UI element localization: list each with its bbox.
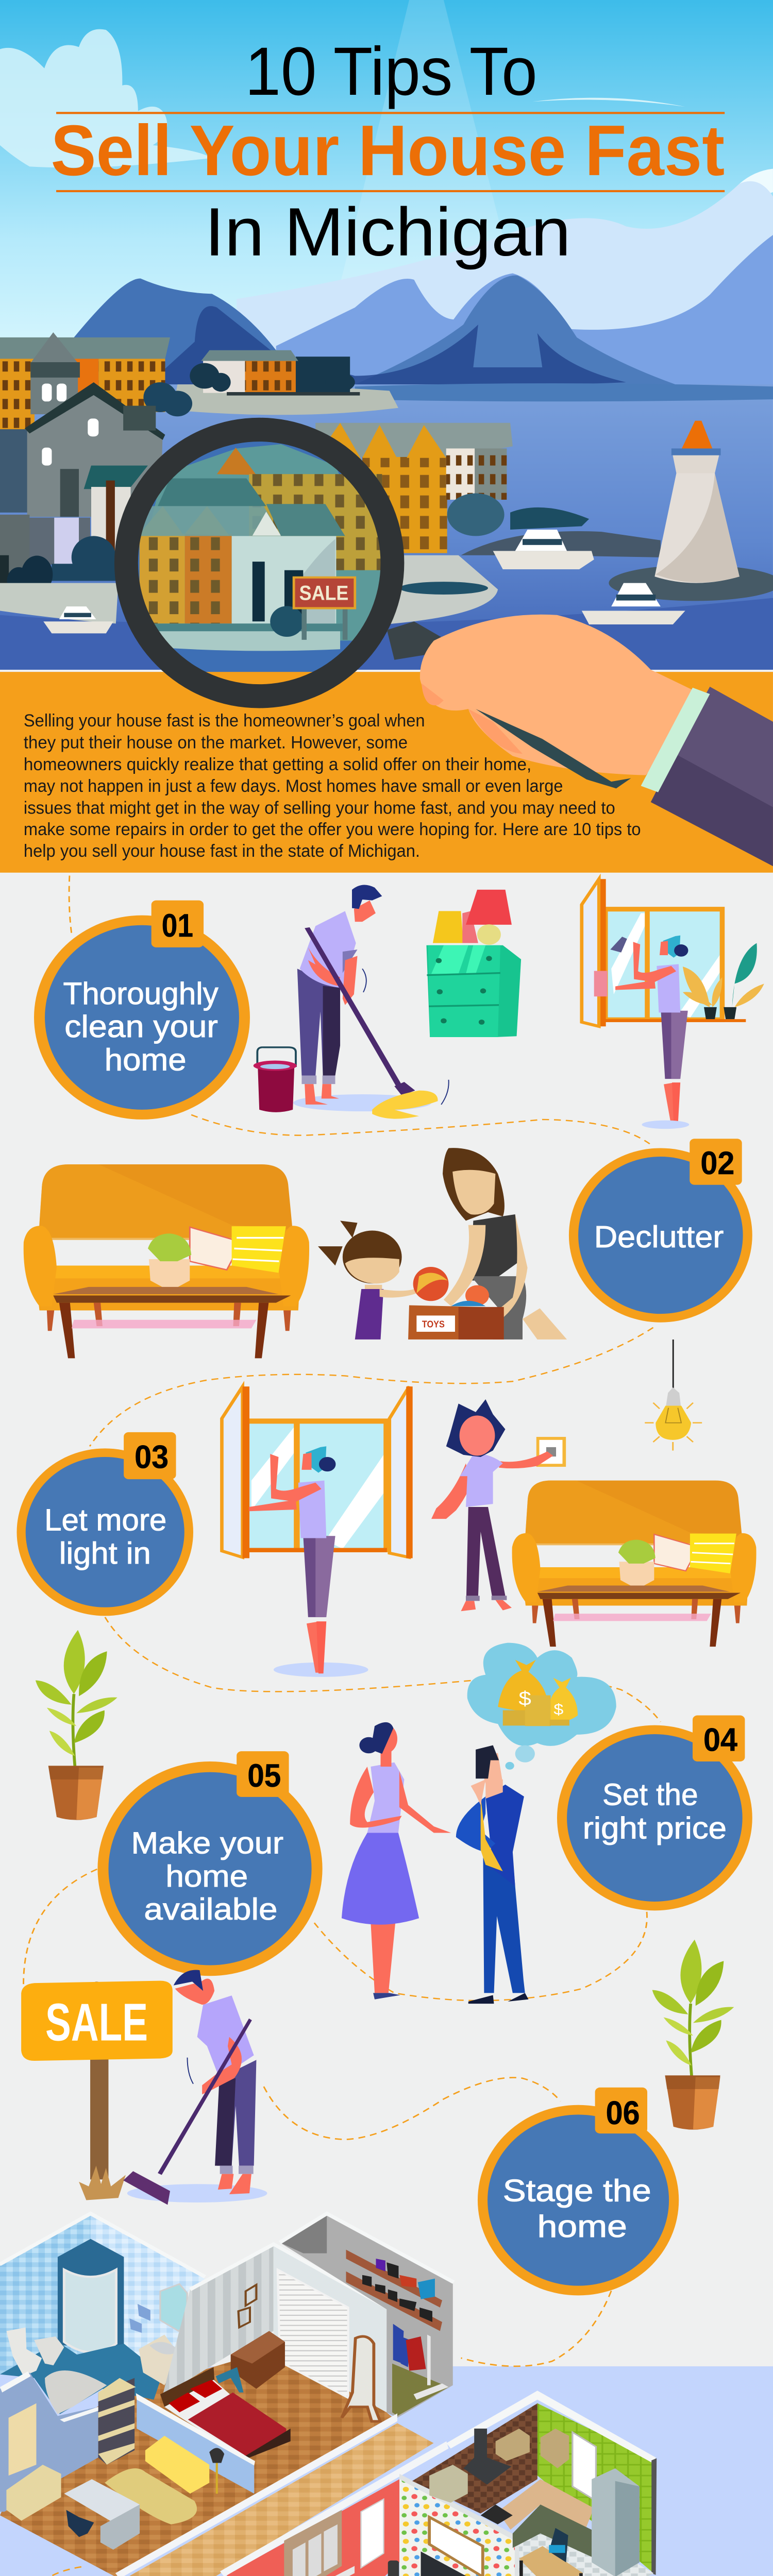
intro text: help you sell your house fast in the state of Michigan. bbox=[24, 841, 420, 861]
tip 01 badge: 01 bbox=[162, 908, 193, 944]
route: tip 6 to house bbox=[461, 2291, 611, 2366]
icon: thought cloud with money: $ bbox=[518, 1687, 531, 1709]
tip 01 badge bbox=[34, 901, 250, 1120]
illustration: woman and businessman talking bbox=[342, 1722, 528, 2004]
tip 06 badge: Stage the bbox=[503, 2173, 651, 2208]
house scene in lens bbox=[136, 439, 382, 687]
route: tip 4 to tip 5 bbox=[314, 1912, 647, 2001]
tips 03 04 05 bbox=[17, 1328, 757, 2130]
route: tip 5 to sale sign bbox=[24, 1869, 97, 1993]
bathroom bbox=[0, 2213, 205, 2414]
sale sign: SALE bbox=[299, 582, 348, 605]
tip 01 badge: Thoroughly bbox=[63, 976, 219, 1011]
light beam bbox=[246, 0, 611, 670]
kitchen bbox=[412, 2391, 657, 2576]
sale sign bbox=[21, 1981, 173, 2200]
illustration: man sweeping bbox=[123, 1970, 267, 2205]
icon: magnifying glass and hand bbox=[114, 418, 773, 866]
bedroom furniture bbox=[160, 2331, 291, 2458]
panel: intro band bbox=[0, 672, 773, 873]
right town buildings bbox=[315, 423, 661, 624]
intro text bbox=[24, 711, 641, 861]
icon: thought cloud with money bbox=[467, 1643, 616, 1770]
illustration: potted plant bbox=[36, 1630, 117, 1820]
yachts bbox=[43, 530, 685, 633]
mountains bbox=[74, 181, 773, 393]
panel: hero landscape bbox=[0, 0, 773, 687]
clouds bbox=[0, 29, 773, 195]
title: 10 Tips To bbox=[245, 33, 537, 110]
tip 03 badge: Let more bbox=[44, 1503, 166, 1537]
intro text: make some repairs in order to get the offer you were hoping for. Here are 10 tips to bbox=[24, 819, 641, 839]
illustration: potted plant right bbox=[652, 1940, 734, 2130]
mirror bbox=[342, 2336, 380, 2421]
illustration: sofa bbox=[512, 1481, 757, 1647]
illustration: green dresser, lamp and books bbox=[426, 890, 521, 1037]
intro text: homeowners quickly realize that getting a solid offer on their home, bbox=[24, 754, 531, 774]
tip 02 badge bbox=[569, 1139, 752, 1323]
tip 04 badge bbox=[557, 1716, 752, 1910]
icon: light bulb bbox=[645, 1340, 702, 1451]
illustration: sofa bbox=[24, 1164, 309, 1358]
intro text: may not happen in just a few days. Most homes have small or even large bbox=[24, 776, 563, 796]
tip 03 badge: 03 bbox=[135, 1439, 169, 1475]
tip 02 badge: 02 bbox=[700, 1145, 734, 1181]
tip 03 badge: light in bbox=[59, 1536, 151, 1570]
route: house to tip 7 bbox=[27, 2567, 106, 2576]
bedroom walls bbox=[162, 2244, 386, 2412]
sale sign: SALE bbox=[45, 1993, 148, 2052]
tip 04 badge: 04 bbox=[703, 1722, 737, 1758]
illustration: isometric house cutaway bbox=[0, 2213, 657, 2576]
walkway bbox=[115, 2413, 433, 2576]
sale sign bbox=[294, 578, 355, 640]
illustration: man at light switch bbox=[431, 1399, 566, 1611]
sale sign, sweeping man and tip 06 bbox=[21, 1970, 679, 2576]
tip 05 badge: Make your bbox=[131, 1826, 283, 1860]
tip 04 badge: Set the bbox=[602, 1777, 698, 1812]
far town bbox=[173, 350, 398, 415]
tip 01 badge: clean your bbox=[64, 1009, 218, 1044]
tip 06 badge: 06 bbox=[606, 2095, 640, 2132]
tip 05 badge: 05 bbox=[247, 1757, 281, 1794]
tip 06 badge bbox=[478, 2088, 679, 2295]
tip 05 badge: home bbox=[165, 1859, 248, 1893]
illustration: mother and child with toy box bbox=[318, 1148, 567, 1340]
illustration: woman cleaning window bbox=[582, 879, 764, 1129]
illustration: bucket bbox=[254, 1047, 297, 1112]
tip 06 badge: home bbox=[537, 2209, 627, 2244]
intro text: Selling your house fast is the homeowner’s goal when bbox=[24, 711, 425, 731]
route: intro to tip 1 bbox=[69, 876, 72, 937]
tips 01 and 02 bbox=[24, 876, 764, 1358]
office wall bbox=[0, 2371, 99, 2512]
tip 05 badge: available bbox=[144, 1892, 278, 1926]
left town buildings bbox=[0, 332, 192, 623]
lighthouse bbox=[609, 421, 773, 601]
living room walls bbox=[220, 2441, 519, 2576]
upper floor wood bbox=[0, 2349, 397, 2576]
illustration: man mopping bbox=[293, 885, 449, 1119]
route: tip 3 to tip 4 bbox=[105, 1617, 661, 1722]
intro text: issues that might get in the way of selling your home fast, and you may need to bbox=[24, 798, 615, 818]
intro text: they put their house on the market. However, some bbox=[24, 733, 408, 752]
lake water bbox=[0, 384, 773, 670]
tip 01 badge: home bbox=[105, 1042, 187, 1077]
illustration: mother and child with toy box: TOYS bbox=[422, 1319, 445, 1330]
office furniture bbox=[6, 2378, 224, 2550]
route: sweeping man to tip 6 bbox=[264, 2078, 561, 2140]
title: In Michigan bbox=[205, 194, 571, 270]
title bbox=[51, 33, 725, 270]
illustration: open window with woman bbox=[222, 1386, 413, 1677]
closet bbox=[280, 2213, 453, 2418]
living room furniture bbox=[291, 2551, 493, 2576]
tip 02 badge: Declutter bbox=[594, 1219, 724, 1254]
icon: thought cloud with money: $ bbox=[553, 1701, 563, 1718]
partition wall bbox=[137, 2396, 254, 2494]
tip 05 badge bbox=[97, 1751, 323, 1976]
tip 04 badge: right price bbox=[583, 1811, 727, 1845]
tip 03 badge bbox=[17, 1432, 193, 1616]
route: tip 1 to tip 2 bbox=[191, 1115, 650, 1144]
route: tip 2 to tip 3 bbox=[90, 1328, 653, 1446]
